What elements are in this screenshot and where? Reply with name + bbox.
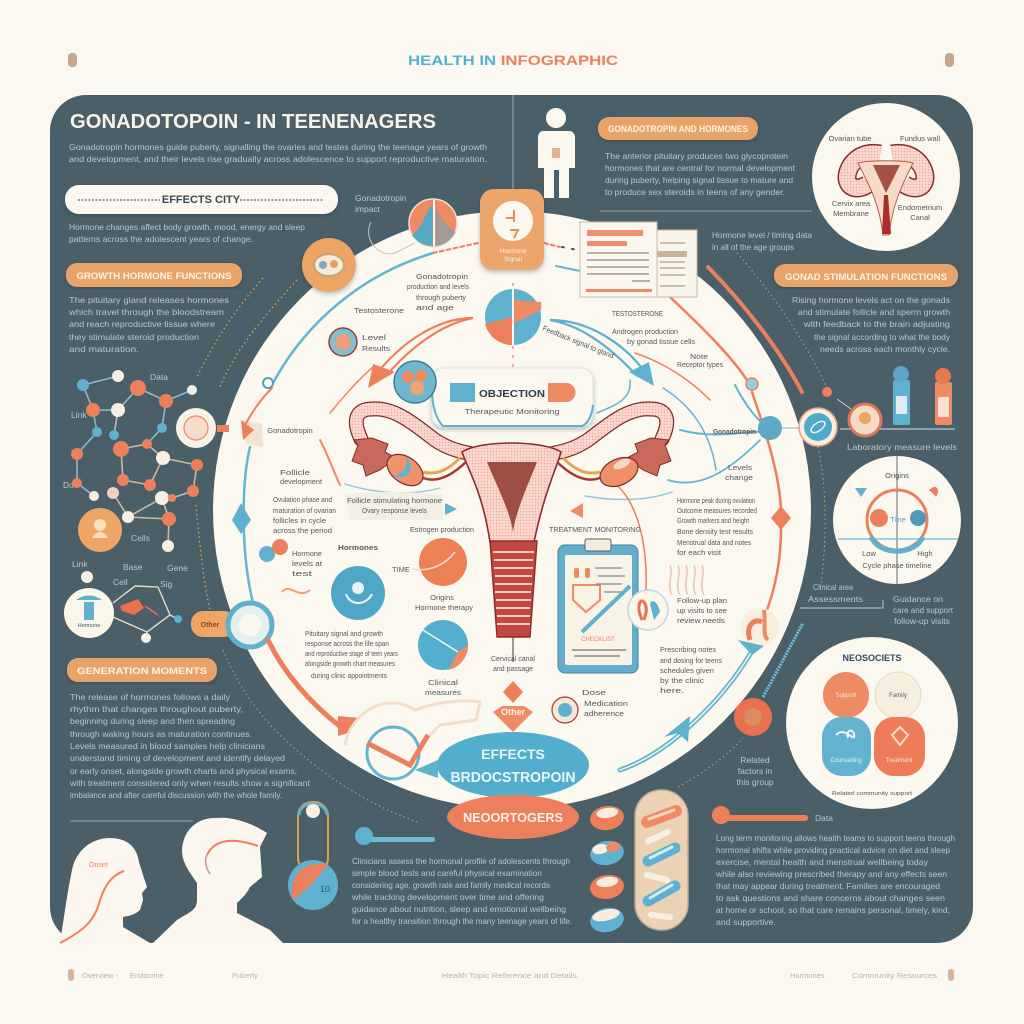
right labels bbox=[582, 463, 757, 718]
header title bbox=[68, 52, 954, 68]
right text block: the signal according to what the body bbox=[814, 332, 951, 342]
light bands under ovaries: Follicle stimulating hormone bbox=[347, 496, 442, 505]
left small labels bbox=[273, 468, 336, 535]
orange heading top right bbox=[598, 117, 758, 140]
labels below uterus bbox=[491, 654, 535, 673]
circle: orange bbox=[392, 538, 467, 586]
label beside badge with curve bbox=[355, 193, 415, 254]
diagonal caption along blue arrow: Feedback signal to gland bbox=[541, 324, 615, 360]
right labels: Dose bbox=[582, 688, 606, 697]
labels: left of pie: during clinic appointments bbox=[311, 671, 387, 680]
intro text: Gonadotropin hormones guide puberty, signalling the ovaries and testes during the teenage years of growth bbox=[69, 142, 487, 152]
arrow: blue small right bbox=[445, 503, 457, 515]
circle: mini uterus diagram: Fundus wall bbox=[900, 134, 940, 143]
left ring diamond bbox=[232, 503, 251, 534]
right labels: Follow-up plan bbox=[677, 596, 727, 605]
intro text: and development, and their levels rise gradually across adolescence to support reproductive maturation. bbox=[69, 154, 487, 164]
bottom middle text: for a healthy transition through the many teenage years of life. bbox=[352, 916, 572, 926]
left small labels: Ovulation phase and bbox=[273, 495, 332, 504]
circle: small lens by clipboard bbox=[628, 590, 668, 630]
circle: pie top center bbox=[485, 289, 541, 345]
labels: upper circle: Note bbox=[690, 354, 708, 361]
label: blue pie: Origins bbox=[430, 593, 454, 602]
orange heading: hormones: GENERATION MOMENTS bbox=[77, 666, 207, 676]
labels: left of pie: and reproductive stage of teen years bbox=[305, 649, 398, 658]
texture swatch bbox=[670, 565, 704, 595]
icon: blue ring node bbox=[799, 408, 837, 446]
clipboard: CHECKLIST bbox=[581, 637, 615, 643]
right labels: Levels bbox=[728, 463, 752, 472]
bottom middle text: simple blood tests and careful physical examination bbox=[352, 868, 542, 878]
card: central objective: OBJECTION bbox=[479, 389, 545, 400]
long left text: rhythm that changes throughout puberty, bbox=[70, 704, 243, 714]
silhouette: boy bbox=[153, 818, 283, 943]
white pill heading: EFFECTS CITY bbox=[162, 194, 241, 206]
center vertical dashed bbox=[512, 283, 514, 372]
lower molecule chain: Cell bbox=[113, 577, 128, 587]
labels: left of pie bbox=[305, 629, 461, 697]
diamond tag bbox=[493, 706, 533, 732]
right labels: change bbox=[725, 473, 753, 482]
documents stack bbox=[580, 222, 697, 297]
small icon: left bbox=[259, 539, 310, 593]
diamond tag: Other bbox=[501, 707, 525, 717]
bottom right text: Long term monitoring allows health teams to support teens through bbox=[716, 833, 955, 843]
circle: orange cell cluster bbox=[394, 361, 436, 403]
labels: upper circle: Androgen production bbox=[612, 327, 678, 336]
growth text: The pituitary gland releases hormones bbox=[69, 295, 229, 305]
long left text: or early onset, alongside growth charts and physical exams, bbox=[70, 766, 297, 776]
label: beside small icon: levels at bbox=[292, 559, 323, 568]
right text block: with feedback to the brain adjusting bbox=[803, 319, 950, 329]
bottom right text: exercise, mental health and menstrual wellbeing today bbox=[716, 857, 929, 867]
icon: orange cell badge top left bbox=[302, 238, 356, 292]
left small labels: Follicle bbox=[280, 468, 310, 477]
label: beside small icon: test bbox=[292, 569, 314, 578]
circle: neosociets grid: NEOSOCIETS bbox=[842, 653, 902, 663]
labels: upper circle: Testosterone bbox=[354, 306, 404, 315]
icon: white sample circle with arrow bbox=[176, 408, 263, 448]
right ring diamond bbox=[771, 506, 791, 530]
footer: Puberty bbox=[232, 971, 258, 980]
top right text: hormones that are central for normal development bbox=[605, 163, 796, 173]
long left text: Levels measured in blood samples help clinicians bbox=[70, 741, 265, 751]
bottom middle text: guidance about nutrition, sleep and emotional wellbeing bbox=[352, 904, 566, 914]
dark main panel bbox=[50, 95, 973, 943]
labels below uterus: Cervical canal bbox=[491, 654, 535, 663]
right labels: Menstrual data and notes bbox=[677, 538, 751, 547]
card: central objective bbox=[432, 368, 593, 427]
icon: top left orange-blue badge bbox=[409, 199, 457, 247]
orange heading top right: GONADOTROPIN AND HORMONES bbox=[608, 124, 748, 134]
large central circle bbox=[213, 211, 811, 809]
pill description bbox=[69, 222, 305, 244]
right labels: here. bbox=[660, 686, 684, 695]
clipboard bbox=[558, 539, 638, 673]
ring arcs bbox=[244, 243, 802, 770]
circle: blue smile bbox=[331, 566, 385, 620]
long left text bbox=[69, 692, 311, 800]
labels: upper circle: by gonad tissue cells bbox=[627, 337, 695, 346]
small orange tag and lens: Other bbox=[201, 622, 220, 629]
circle: cycle diagram bbox=[833, 456, 961, 584]
labels: left of pie: Pituitary signal and growth bbox=[305, 629, 383, 638]
node and label inside ring right bbox=[713, 378, 800, 440]
right text block: and stimulate follicle and sperm growth bbox=[798, 307, 950, 317]
main title: GONADOTOPOIN - IN TEENENAGERS bbox=[70, 111, 436, 133]
labels below cycle circle bbox=[800, 582, 954, 626]
pill description: Hormone changes affect body growth, mood, energy and sleep bbox=[69, 222, 305, 232]
ring arrow head: lower left bbox=[338, 716, 360, 736]
dotted connector lines bbox=[196, 253, 826, 822]
lower molecule chain: Sig bbox=[160, 579, 173, 589]
molecule network: Data bbox=[150, 372, 168, 382]
growth text: and reach reproductive tissue where bbox=[69, 319, 215, 329]
long left text: The release of hormones follows a daily bbox=[70, 692, 231, 702]
small pills column bbox=[588, 804, 626, 935]
label beside badge with curve: Gonadotropin bbox=[355, 193, 407, 203]
right ovary bbox=[595, 452, 643, 492]
top right text: during puberty, helping signal tissue to mature and bbox=[605, 175, 793, 185]
labels: left of pie: alongside growth chart measures bbox=[305, 659, 395, 668]
small diamond connector bbox=[503, 681, 523, 703]
label top right of circle: in all of the age groups bbox=[712, 242, 794, 252]
labels: upper circle: Results bbox=[362, 346, 391, 353]
label: blue pie: Hormone therapy bbox=[415, 603, 473, 612]
label: blue pie bbox=[415, 593, 473, 612]
blue arrow to pill bbox=[415, 760, 438, 778]
circle: orange: TIME bbox=[392, 565, 410, 574]
label: orange circle: Estrogen production bbox=[410, 525, 474, 534]
circle: mini uterus diagram: Canal bbox=[910, 213, 930, 222]
top right text bbox=[605, 151, 796, 197]
molecule network: Do bbox=[63, 480, 74, 490]
right text block: Rising hormone levels act on the gonads bbox=[792, 295, 950, 305]
right labels: Medication bbox=[584, 699, 628, 708]
growth text bbox=[68, 295, 229, 354]
label: left arrow: Gonadotropin bbox=[267, 426, 313, 435]
icon: blue slider bbox=[355, 827, 435, 845]
molecule network: Link bbox=[71, 410, 87, 420]
blue ellipse: effects: BRDOCSTROPOIN bbox=[450, 769, 576, 786]
top right text: to produce sex steroids in teens of any gender. bbox=[605, 187, 785, 197]
right labels: schedules given bbox=[660, 666, 714, 675]
right lower ball with label bbox=[734, 698, 774, 787]
circle: neosociets grid: Counselling bbox=[830, 758, 862, 764]
labels: upper circle: Receptor types bbox=[677, 362, 723, 369]
labels below cycle circle: follow-up visits bbox=[894, 616, 950, 626]
bottom middle text: Clinicians assess the hormonal profile of adolescents through bbox=[352, 856, 570, 866]
labels below cycle circle: Clinical area bbox=[813, 582, 853, 592]
white pill heading bbox=[65, 185, 338, 214]
circle: neosociets grid: Family bbox=[889, 693, 907, 699]
left small labels: development bbox=[280, 477, 323, 486]
vials on shelf bbox=[837, 366, 955, 436]
light bands under ovaries bbox=[345, 492, 443, 520]
lower molecule chain: Link bbox=[72, 559, 88, 569]
labels: upper circle: through puberty bbox=[416, 293, 466, 302]
circle: cycle diagram: Low bbox=[862, 549, 876, 558]
circle: cycle diagram: High bbox=[917, 549, 933, 558]
label: clipboard heading: TREATMENT MONITORING bbox=[549, 525, 641, 534]
labels: upper circle: and age bbox=[416, 303, 454, 312]
footer bbox=[68, 969, 954, 981]
growth text: and maturation. bbox=[69, 344, 139, 354]
right text block: needs across each monthly cycle. bbox=[820, 344, 950, 354]
right labels: Hormone peak during ovulation bbox=[677, 496, 755, 505]
right labels: review needs bbox=[677, 616, 725, 625]
circle: neosociets grid: Related community support bbox=[832, 791, 913, 797]
icon: person bbox=[538, 108, 575, 198]
orange heading right: GONAD STIMULATION FUNCTIONS bbox=[785, 272, 947, 282]
long left text: beginning during sleep and then spreading bbox=[70, 716, 235, 726]
left small labels: follicles in cycle bbox=[273, 516, 326, 525]
small orange tag and lens bbox=[191, 603, 272, 647]
lower molecule chain bbox=[64, 559, 188, 643]
circle: cycle diagram: Origins bbox=[885, 471, 909, 480]
bottom right slider: Data bbox=[815, 813, 833, 823]
label: beside small icon bbox=[292, 549, 323, 578]
node and label inside ring right: Gonadotropin bbox=[713, 427, 756, 436]
intro text bbox=[69, 142, 487, 164]
label: hormones: Hormones bbox=[338, 543, 378, 552]
label beside badge with curve: impact bbox=[355, 204, 381, 214]
arrow: orange small left bbox=[570, 503, 583, 518]
orange heading: growth bbox=[66, 263, 242, 287]
labels below cycle circle: care and support bbox=[893, 605, 954, 615]
labels: upper circle bbox=[354, 272, 723, 369]
bottom middle text: considering age, growth rate and family medical records bbox=[352, 880, 550, 890]
silhouette: girl: Onset bbox=[89, 862, 108, 869]
bottom right text bbox=[715, 833, 955, 927]
orange heading right bbox=[774, 264, 958, 287]
arrow: orange top left bbox=[368, 318, 473, 388]
top right text: The anterior pituitary produces two glycoprotein bbox=[605, 151, 788, 161]
arrow: blue top right bbox=[550, 320, 654, 386]
labels: left of pie: response across the life span bbox=[305, 639, 389, 648]
circle: top left small cell bbox=[329, 328, 357, 356]
right labels: for each visit bbox=[677, 548, 722, 557]
pill description: patterns across the adolescent years of change. bbox=[69, 234, 253, 244]
molecule network bbox=[63, 370, 203, 552]
long left text: with treatment considered only when results show a significant bbox=[69, 778, 311, 788]
red dot bbox=[822, 387, 832, 397]
badge: orange hormone card bbox=[480, 189, 544, 270]
circle: blue pie bbox=[418, 620, 468, 670]
lower molecule chain: Gene bbox=[167, 563, 188, 573]
bottom right slider bbox=[712, 806, 833, 824]
ring arrow head: lower right bbox=[664, 716, 690, 742]
footer: Endocrine bbox=[130, 971, 164, 980]
circle: cycle diagram: Time bbox=[890, 517, 906, 524]
left small labels: across the period bbox=[273, 526, 332, 535]
label: beside small icon: Hormone bbox=[292, 549, 322, 558]
long left text: imbalance and after careful discussion with the whole family. bbox=[70, 790, 282, 800]
left small labels: maturation of ovarian bbox=[273, 506, 336, 515]
right labels: by the clinic bbox=[660, 676, 704, 685]
orange ellipse: NEOORTOGERS bbox=[463, 810, 563, 825]
right labels: up visits to see bbox=[677, 606, 727, 615]
icon: gauge lollipop: 10 bbox=[320, 884, 330, 894]
footer: Community Resources bbox=[852, 971, 937, 980]
right labels: Prescribing notes bbox=[660, 645, 716, 654]
growth text: which travel through the bloodstream bbox=[68, 307, 224, 317]
circle: mini uterus diagram bbox=[812, 103, 960, 251]
molecule network: Cells bbox=[131, 533, 150, 543]
circle: neosociets grid: Treatment bbox=[885, 758, 913, 764]
right lower ball with label: factors in bbox=[738, 766, 773, 776]
lens with chevron bbox=[345, 701, 480, 779]
bottom right text: that may appear during treatment. Families are encouraged bbox=[716, 881, 940, 891]
icon: orange cell badge bbox=[78, 508, 122, 552]
circle: mini uterus diagram: Endometrium bbox=[898, 203, 942, 212]
central divider line bbox=[512, 95, 514, 192]
footer: Overview - bbox=[82, 971, 118, 980]
card: central objective: Therapeutic Monitoring bbox=[464, 407, 560, 416]
labels: upper circle: Gonadotropin bbox=[416, 272, 468, 281]
bottom right text: to ask questions and share concerns about changes seen bbox=[716, 893, 945, 903]
labels below uterus: and passage bbox=[493, 664, 533, 673]
labels: upper circle: production and levels bbox=[407, 282, 469, 291]
uterine cavity bbox=[487, 462, 537, 532]
lower molecule chain: Hormone bbox=[78, 623, 100, 629]
circle: cycle diagram: Cycle phase timeline bbox=[862, 561, 932, 570]
long left text: through waking hours as maturation continues. bbox=[70, 729, 252, 739]
footer: Hormones bbox=[790, 971, 825, 980]
blue ellipse: effects: EFFECTS bbox=[481, 746, 545, 762]
small dose icon bbox=[552, 697, 578, 723]
right lower ball with label: this group bbox=[736, 777, 774, 787]
right labels: Outcome measures recorded bbox=[677, 506, 757, 515]
circle: mini uterus diagram: Membrane bbox=[833, 209, 869, 218]
right labels: adherence bbox=[584, 709, 624, 718]
footer: Health Topic Reference and Details bbox=[442, 971, 577, 980]
labels below cycle circle: Assessments bbox=[808, 594, 863, 604]
silhouette: girl bbox=[60, 838, 150, 943]
swirl lens right bbox=[738, 608, 779, 655]
labels below cycle circle: Guidance on bbox=[893, 594, 943, 604]
right text block bbox=[792, 295, 951, 354]
uterus body bbox=[462, 443, 561, 542]
small ring node top left bbox=[263, 378, 273, 388]
right labels: Growth markers and height bbox=[677, 516, 750, 525]
large capsule bbox=[635, 790, 688, 930]
blue link to ball bbox=[763, 623, 803, 697]
header title: HEALTH IN INFOGRAPHIC bbox=[408, 52, 618, 68]
circle: neosociets grid bbox=[786, 637, 958, 809]
bottom right text: while also reviewing prescribed therapy and any effects seen bbox=[715, 869, 947, 879]
badge: orange hormone card: Hormone bbox=[500, 248, 527, 255]
long left text: understand timing of development and identify delayed bbox=[70, 753, 285, 763]
label top right of circle: Hormone level / timing data bbox=[712, 230, 812, 240]
labels: upper circle: TESTOSTERONE bbox=[612, 309, 663, 318]
bottom middle text bbox=[351, 856, 572, 926]
orange heading: growth: GROWTH HORMONE FUNCTIONS bbox=[76, 271, 232, 281]
right labels: Bone density test results bbox=[677, 527, 753, 536]
birth canal bbox=[490, 541, 537, 637]
orange ellipse bbox=[447, 795, 579, 839]
badge: orange hormone card: Signal bbox=[504, 256, 523, 263]
labels: upper circle: Level bbox=[362, 335, 387, 342]
bottom right text: hormonal shifts while providing practical advice on diet and sleep bbox=[716, 845, 950, 855]
bottom middle text: while tracking development over time and offering bbox=[351, 892, 544, 902]
labels: left of pie: Clinical bbox=[428, 678, 458, 687]
right lower ball with label: Related bbox=[740, 755, 770, 765]
icon: gauge lollipop bbox=[288, 802, 338, 910]
lower molecule chain: Base bbox=[123, 562, 143, 572]
main uterus illustration bbox=[352, 409, 671, 637]
blue ellipse: effects bbox=[437, 732, 589, 798]
circle: mini uterus diagram: Ovarian tube bbox=[829, 134, 871, 143]
right labels: and dosing for teens bbox=[660, 656, 722, 665]
circle: mini uterus diagram: Cervix area bbox=[832, 199, 871, 208]
label top right of circle bbox=[712, 230, 812, 252]
center line below uterus bbox=[512, 637, 514, 662]
shelf caption: Laboratory measure levels bbox=[847, 442, 957, 452]
orange heading: hormones bbox=[67, 658, 217, 682]
growth text: they stimulate steroid production bbox=[69, 332, 199, 342]
left ovary bbox=[381, 448, 429, 492]
circle: neosociets grid: Support bbox=[835, 693, 857, 699]
bottom right text: at home or school, so that care remains personal, timely, kind, bbox=[716, 905, 950, 915]
bottom right text: and supportive. bbox=[716, 917, 776, 927]
light bands under ovaries: Ovary response levels bbox=[362, 506, 427, 515]
labels: left of pie: measures bbox=[425, 688, 461, 697]
